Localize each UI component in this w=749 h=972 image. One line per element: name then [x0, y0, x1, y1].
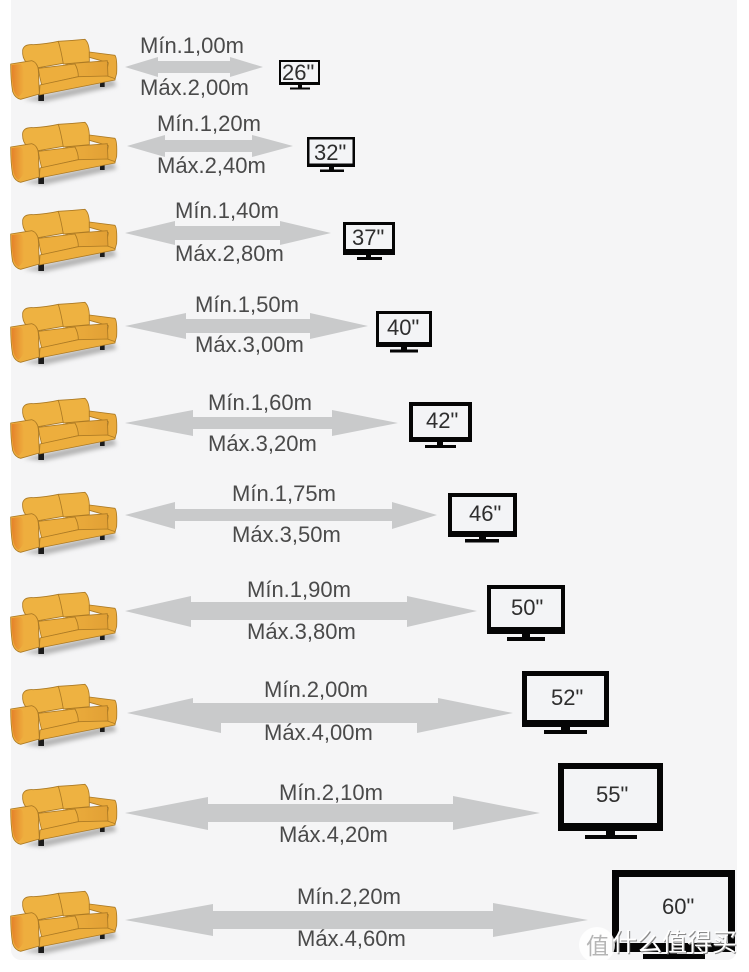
icon: sofa: [11, 122, 117, 185]
icon: TV 52 inch: 52": [551, 685, 583, 710]
icon: sofa: [11, 209, 117, 272]
minimum distance: Mín.1,60m: [208, 390, 312, 415]
arrow: distance range: [125, 221, 331, 245]
maximum distance: Máx.3,80m: [247, 619, 356, 644]
icon: TV 46 inch: 46": [469, 501, 501, 526]
minimum distance: Mín.1,90m: [247, 577, 351, 602]
icon: TV 50 inch: 50": [511, 595, 543, 620]
minimum distance: Mín.1,50m: [195, 292, 299, 317]
icon: TV 60 inch: [612, 870, 735, 959]
icon: sofa: [11, 684, 117, 747]
icon: TV 26 inch: 26": [282, 60, 314, 85]
maximum distance: Máx.3,20m: [208, 431, 317, 456]
row: 37 inch TV: [11, 198, 395, 272]
icon: TV 26 inch: [279, 60, 320, 90]
minimum distance: Mín.2,20m: [297, 884, 401, 909]
maximum distance: Máx.4,20m: [279, 822, 388, 847]
minimum distance: Mín.1,00m: [140, 33, 244, 58]
minimum distance: Mín.1,20m: [157, 111, 261, 136]
maximum distance: Máx.4,00m: [264, 720, 373, 745]
icon: sofa: [11, 302, 117, 365]
maximum distance: Máx.2,00m: [140, 75, 249, 100]
row: 26 inch TV: [11, 33, 320, 102]
minimum distance: Mín.2,10m: [279, 780, 383, 805]
arrow: distance range: [125, 502, 437, 529]
icon: sofa: [11, 398, 117, 461]
icon: TV 52 inch: [522, 671, 609, 734]
arrow: distance range: [125, 796, 540, 830]
icon: sofa: [11, 784, 117, 847]
maximum distance: Máx.4,60m: [297, 926, 406, 951]
row: 32 inch TV: [11, 111, 355, 185]
arrow: distance range: [127, 698, 513, 733]
row: 46 inch TV: [11, 481, 517, 555]
icon: TV 50 inch: [487, 585, 565, 641]
watermark: 值: [586, 933, 609, 959]
minimum distance: Mín.2,00m: [264, 677, 368, 702]
icon: TV 60 inch: 60": [662, 894, 694, 919]
minimum distance: Mín.1,40m: [175, 198, 279, 223]
row: 60 inch TV: [11, 870, 735, 959]
row: 52 inch TV: [11, 671, 609, 747]
arrow: distance range: [125, 410, 398, 436]
maximum distance: Máx.2,40m: [157, 153, 266, 178]
watermark: [579, 927, 737, 963]
row: 55 inch TV: [11, 763, 663, 847]
icon: sofa: [11, 492, 117, 555]
icon: TV 40 inch: 40": [387, 315, 419, 340]
arrow: distance range: [125, 596, 477, 627]
watermark: 什么值得买: [612, 929, 737, 957]
icon: TV 40 inch: [376, 311, 432, 352]
icon: TV 32 inch: [307, 137, 355, 172]
icon: TV 42 inch: 42": [426, 408, 458, 433]
maximum distance: Máx.3,00m: [195, 332, 304, 357]
icon: TV 55 inch: [558, 763, 663, 839]
icon: TV 37 inch: [343, 222, 395, 260]
icon: sofa: [11, 39, 117, 102]
icon: TV 46 inch: [448, 493, 517, 542]
icon: sofa: [11, 592, 117, 655]
arrow: distance range: [125, 903, 588, 937]
icon: TV 37 inch: 37": [352, 225, 384, 250]
row: 40 inch TV: [11, 292, 432, 365]
arrow: distance range: [127, 135, 293, 157]
maximum distance: Máx.3,50m: [232, 522, 341, 547]
icon: TV 42 inch: [409, 402, 472, 448]
row: 42 inch TV: [11, 390, 472, 461]
icon: sofa: [11, 891, 117, 954]
arrow: distance range: [125, 57, 263, 77]
row: 50 inch TV: [11, 577, 565, 655]
icon: TV 32 inch: 32": [314, 140, 346, 165]
minimum distance: Mín.1,75m: [232, 481, 336, 506]
maximum distance: Máx.2,80m: [175, 241, 284, 266]
icon: TV 55 inch: 55": [596, 782, 628, 807]
arrow: distance range: [125, 313, 368, 339]
